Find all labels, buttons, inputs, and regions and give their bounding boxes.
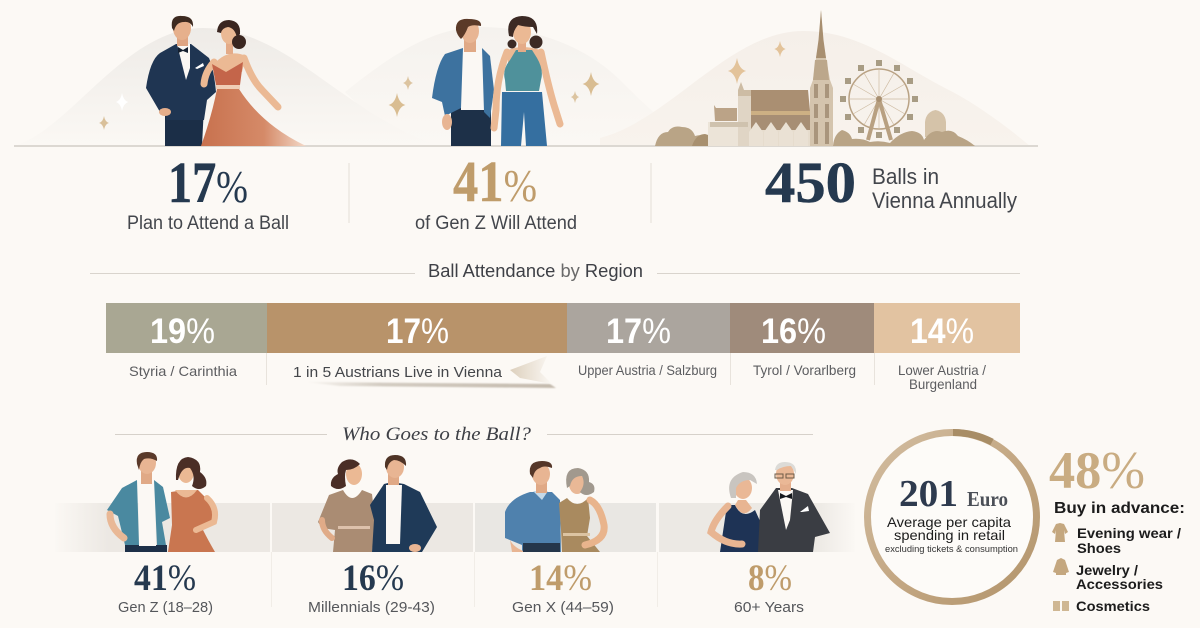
segment: Tyrol / Vorarlberg 16%: 16%	[761, 312, 826, 351]
stat: 450 balls: Vienna Annually	[872, 188, 1017, 213]
callout: 201 Euro spending ring: excluding tickets & consumption	[885, 544, 1018, 555]
stat: 60+ Years 8%	[734, 558, 804, 616]
segment: Upper Austria / Salzburg 17%: 17%	[606, 312, 671, 351]
stat: Gen X 14%: Gen X (44–59)	[512, 599, 614, 616]
segment: Lower Austria / Burgenland 14%: 14%	[910, 312, 974, 351]
segment: Upper Austria / Salzburg 17%	[567, 303, 730, 378]
illustration: casual Gen Z couple	[432, 16, 560, 146]
segment: Styria / Carinthia 19%: 19%	[150, 312, 215, 351]
band: age group backdrop	[55, 503, 855, 552]
illustration: 60+ couple	[711, 462, 830, 552]
stat: 17% plan to attend: 17%	[168, 150, 248, 215]
stat: 48% buy in advance	[1049, 442, 1185, 614]
heading: Who Goes to the Ball?: Who Goes to the Ball?	[342, 424, 532, 445]
illustration: hills backdrop	[14, 27, 1038, 147]
callout: 201 Euro spending ring: Average per capita	[887, 514, 1011, 530]
stat: 450 balls: 450	[765, 150, 856, 215]
stat: 450 balls	[765, 150, 1017, 215]
callout: 201 Euro spending ring: 201	[899, 473, 958, 515]
callout: 201 Euro spending ring	[868, 432, 1036, 602]
stat: Gen X 14%	[512, 558, 614, 616]
stat: Millennials 16%: Millennials (29-43)	[308, 599, 435, 616]
stat: Millennials 16%: 16%	[342, 558, 404, 599]
callout: 201 Euro spending ring: Euro	[967, 487, 1008, 511]
stat: 60+ Years 8%: 8%	[748, 558, 792, 599]
stat: 41% of Gen Z: of Gen Z Will Attend	[415, 213, 577, 234]
stat: 48% buy in advance: Buy in advance:	[1054, 500, 1185, 517]
callout: 201 Euro spending ring: spending in retail	[894, 527, 1005, 543]
stat: 48% buy in advance: Shoes	[1077, 540, 1121, 556]
icon: sparkles top left	[99, 41, 786, 130]
segment: Upper Austria / Salzburg 17%: Upper Austria / Salzburg	[578, 362, 717, 378]
illustration: Gen X couple	[505, 461, 604, 552]
segment: Lower Austria / Burgenland 14%	[874, 303, 1020, 392]
stat: Gen X 14%: 14%	[529, 558, 592, 599]
stat: Gen Z 41%	[118, 558, 213, 616]
segment: Lower Austria / Burgenland 14%: Lower Austria /	[898, 362, 986, 378]
segment: Lower Austria / Burgenland 14%: Burgenland	[909, 376, 977, 392]
stat: 48% buy in advance: Cosmetics	[1076, 598, 1150, 614]
stat: Gen Z 41%: 41%	[134, 558, 196, 599]
icon: jewelry	[1053, 558, 1069, 575]
illustration: Vienna skyline with cathedral and ferris wheel	[655, 10, 975, 146]
heading: Ball Attendance by Region: Ball Attendance by Region	[428, 261, 643, 281]
segment: Vienna 17%	[267, 303, 567, 388]
stat: 60+ Years 8%: 60+ Years	[734, 599, 804, 616]
segment: Vienna 17%: 1 in 5 Austrians Live in Vienna	[293, 364, 503, 381]
stat: 48% buy in advance: Jewelry /	[1076, 562, 1138, 578]
stat: 48% buy in advance: 48%	[1049, 442, 1145, 500]
stat: Millennials 16%	[308, 558, 435, 616]
illustration: Millennials couple	[318, 455, 437, 552]
segment: Styria / Carinthia 19%	[106, 303, 267, 379]
icon: cosmetics	[1053, 601, 1069, 611]
stat: 17% plan to attend	[127, 150, 289, 234]
segment: Styria / Carinthia 19%: Styria / Carinthia	[129, 363, 237, 379]
illustration: couple in formal ball attire	[146, 16, 306, 146]
illustration: Gen Z couple	[107, 452, 215, 552]
segment: Tyrol / Vorarlberg 16%: Tyrol / Vorarlberg	[753, 362, 856, 378]
stat: Gen Z 41%: Gen Z (18–28)	[118, 599, 213, 616]
segment: Vienna 17%: 17%	[386, 312, 449, 351]
stat: 48% buy in advance: Evening wear /	[1077, 525, 1181, 541]
stat: 17% plan to attend: Plan to Attend a Ball	[127, 213, 289, 234]
stat: 48% buy in advance: Accessories	[1076, 576, 1163, 592]
icon: evening wear	[1052, 523, 1068, 542]
stat: 41% of Gen Z: 41%	[453, 149, 537, 214]
segment: Tyrol / Vorarlberg 16%	[730, 303, 874, 378]
stat: 450 balls: Balls in	[872, 164, 939, 189]
chart: regional attendance bar	[106, 303, 1020, 392]
stat: 41% of Gen Z	[415, 149, 577, 234]
